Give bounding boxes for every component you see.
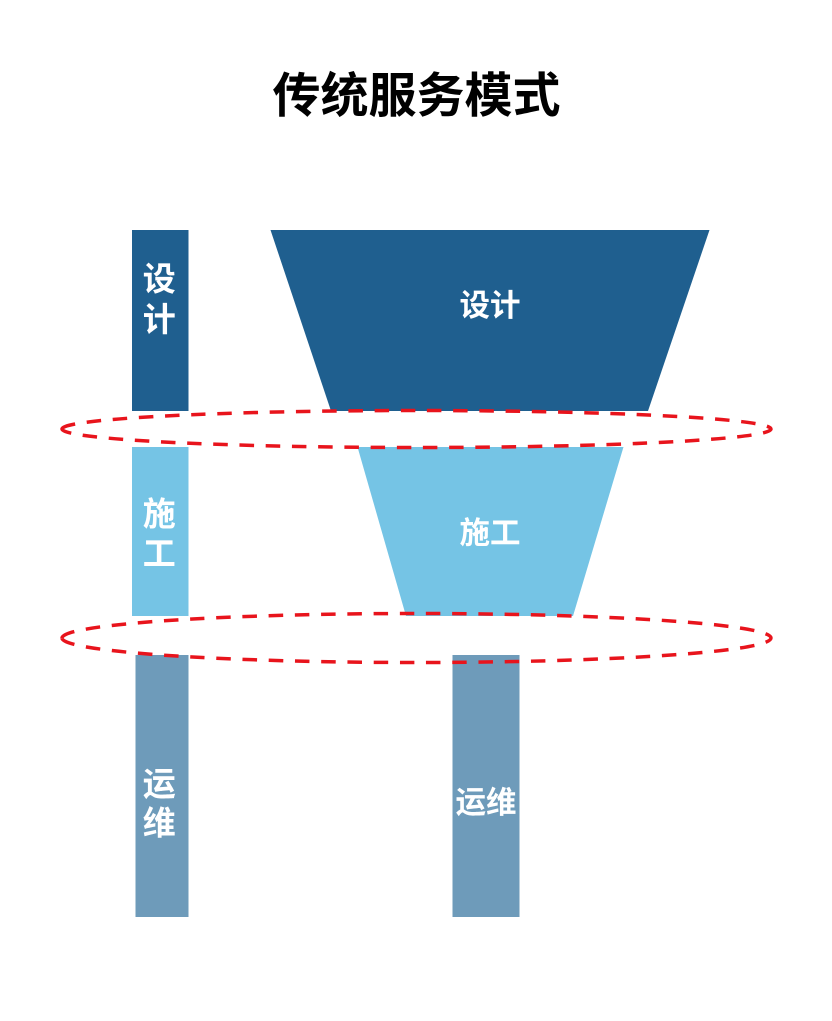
left bar: design bbox=[132, 230, 188, 411]
left bar: construction: 工 bbox=[143, 535, 176, 572]
dashed ellipse: construction to operations handoff bbox=[62, 614, 771, 662]
dashed ellipse: design to construction handoff bbox=[62, 410, 771, 448]
funnel: construction: 施工 bbox=[460, 516, 520, 550]
funnel: construction bbox=[358, 447, 624, 616]
funnel: design: 设计 bbox=[460, 289, 520, 323]
title: 传统服务模式 bbox=[272, 70, 561, 123]
left bar: operations: 运 bbox=[143, 766, 176, 802]
left bar: construction bbox=[132, 447, 188, 616]
left bar: operations: 维 bbox=[143, 804, 176, 842]
left bar: design: 计 bbox=[143, 301, 176, 338]
funnel: operations bbox=[452, 655, 520, 917]
left bar: construction: 施 bbox=[143, 496, 176, 532]
left bar: design: 设 bbox=[143, 260, 176, 298]
funnel: operations: 运维 bbox=[456, 786, 516, 820]
funnel: design bbox=[270, 230, 710, 411]
left bar: operations bbox=[136, 655, 188, 917]
